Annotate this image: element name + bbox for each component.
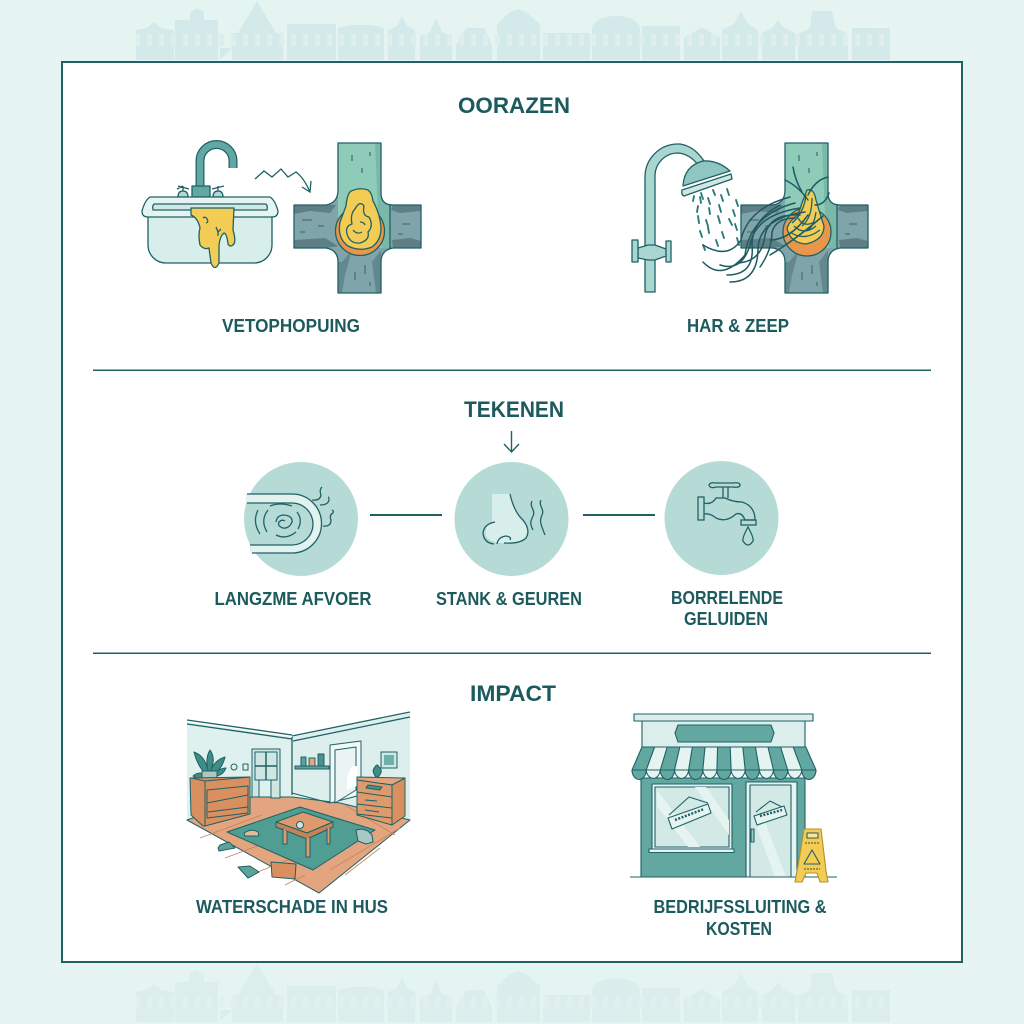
label: har en zeep: HAR & ZEEP bbox=[687, 316, 789, 336]
label: borrelende geluiden: GELUIDEN bbox=[684, 609, 768, 629]
icon: hair strands bbox=[703, 167, 829, 282]
connector line bbox=[370, 514, 442, 516]
connector line bbox=[583, 514, 655, 516]
label: vetophopuing: VETOPHOPUING bbox=[222, 316, 360, 336]
label: borrelende geluiden: BORRELENDE bbox=[671, 588, 783, 608]
decorative skyline: bottom bbox=[136, 963, 890, 1022]
divider bbox=[93, 652, 931, 654]
icon: water drops bbox=[693, 189, 739, 250]
label: bedrijfssluiting en kosten bbox=[654, 897, 826, 939]
label: bedrijfssluiting en kosten: BEDRIJFSSLUITING & bbox=[654, 897, 826, 917]
icon: pipe with fat blockage bbox=[294, 143, 421, 293]
icon: nose circle bbox=[454, 462, 568, 576]
divider bbox=[93, 370, 931, 371]
illustration: water damaged room bbox=[187, 712, 410, 893]
label: waterschade in hus: WATERSCHADE IN HUS bbox=[196, 897, 388, 917]
decorative skyline: top bbox=[136, 1, 890, 60]
section: impact bbox=[187, 681, 837, 939]
arrow: zigzag to pipe bbox=[255, 169, 311, 192]
illustration: closed shop bbox=[630, 714, 837, 882]
label: stank en geuren: STANK & GEUREN bbox=[436, 589, 582, 609]
arrow: down bbox=[504, 431, 519, 452]
label: langzme afvoer: LANGZME AFVOER bbox=[214, 589, 372, 609]
icon: pipe with hair clog bbox=[741, 143, 868, 293]
icon: sink with fat bbox=[142, 144, 278, 268]
heading: impact: IMPACT bbox=[470, 681, 557, 706]
heading: tekenen: TEKENEN bbox=[464, 397, 564, 422]
icon: slow drain circle bbox=[244, 462, 358, 576]
main panel frame bbox=[62, 62, 962, 962]
section: tekenen bbox=[214, 397, 783, 629]
label: borrelende geluiden bbox=[671, 588, 783, 629]
heading: oorazen: OORAZEN bbox=[458, 93, 570, 118]
label: bedrijfssluiting en kosten: KOSTEN bbox=[706, 919, 772, 939]
section: oorzaken bbox=[142, 93, 868, 336]
icon: dripping tap circle bbox=[664, 461, 778, 575]
icon: shower bbox=[632, 144, 732, 292]
